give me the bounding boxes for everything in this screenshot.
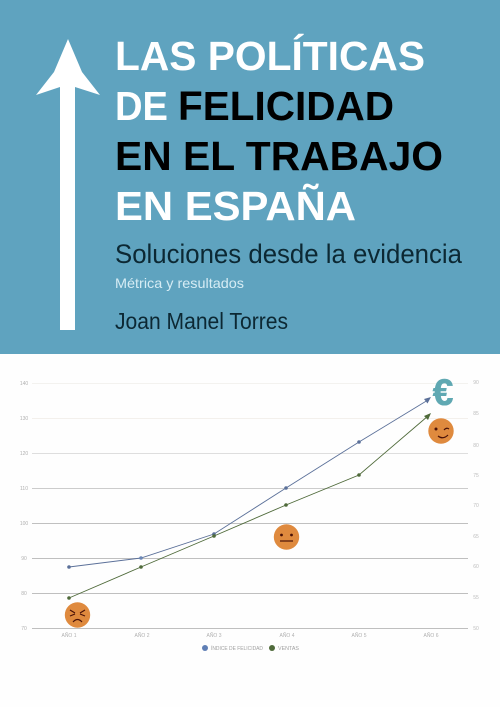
left axis labels: 130 bbox=[20, 416, 28, 422]
x axis labels: AÑO 5 bbox=[351, 632, 367, 639]
left axis labels: 100 bbox=[20, 521, 28, 527]
x axis labels bbox=[61, 632, 439, 639]
line chart bbox=[20, 372, 479, 652]
right axis labels: 60 bbox=[473, 564, 479, 570]
title: DE bbox=[115, 83, 168, 129]
icon: white upward arrow bbox=[36, 39, 100, 330]
right axis labels: 85 bbox=[473, 411, 479, 417]
left axis labels: 90 bbox=[21, 556, 27, 562]
left axis labels: 80 bbox=[21, 591, 27, 597]
right axis labels: 80 bbox=[473, 443, 479, 449]
left axis labels: 140 bbox=[20, 381, 28, 387]
x axis labels: AÑO 3 bbox=[206, 632, 222, 639]
left axis labels: 110 bbox=[20, 486, 28, 492]
title: EN EL TRABAJO bbox=[115, 133, 443, 179]
right axis labels: 90 bbox=[473, 380, 479, 386]
right axis labels: 70 bbox=[473, 503, 479, 509]
right axis labels: 55 bbox=[473, 595, 479, 601]
subtitle: Soluciones desde la evidencia bbox=[115, 239, 463, 269]
x axis labels: AÑO 2 bbox=[134, 632, 150, 639]
data line: índice de felicidad bbox=[67, 397, 431, 569]
tagline: Métrica y resultados bbox=[115, 275, 244, 291]
left axis labels bbox=[20, 381, 28, 632]
right axis labels: 75 bbox=[473, 473, 479, 479]
legend: VENTAS bbox=[278, 646, 300, 652]
icon: winking face bbox=[428, 418, 454, 444]
data line: ventas bbox=[67, 413, 431, 600]
author: Joan Manel Torres bbox=[115, 308, 288, 334]
left axis labels: 120 bbox=[20, 451, 28, 457]
right axis labels bbox=[473, 380, 479, 632]
title: EN ESPAÑA bbox=[115, 183, 356, 229]
legend bbox=[202, 645, 300, 652]
x axis labels: AÑO 1 bbox=[61, 632, 77, 639]
title bbox=[115, 33, 443, 229]
title: LAS POLÍTICAS bbox=[115, 33, 425, 79]
icon: neutral face bbox=[274, 524, 299, 550]
x axis labels: AÑO 4 bbox=[279, 632, 295, 639]
right axis labels: 50 bbox=[473, 626, 479, 632]
panel: blue cover header bbox=[0, 0, 500, 354]
left axis labels: 70 bbox=[21, 626, 27, 632]
x axis labels: AÑO 6 bbox=[423, 632, 439, 639]
icon: euro symbol: € bbox=[433, 372, 453, 413]
icon: sad face bbox=[65, 602, 90, 628]
title: FELICIDAD bbox=[178, 83, 394, 129]
right axis labels: 65 bbox=[473, 534, 479, 540]
legend: ÍNDICE DE FELICIDAD bbox=[211, 645, 263, 652]
